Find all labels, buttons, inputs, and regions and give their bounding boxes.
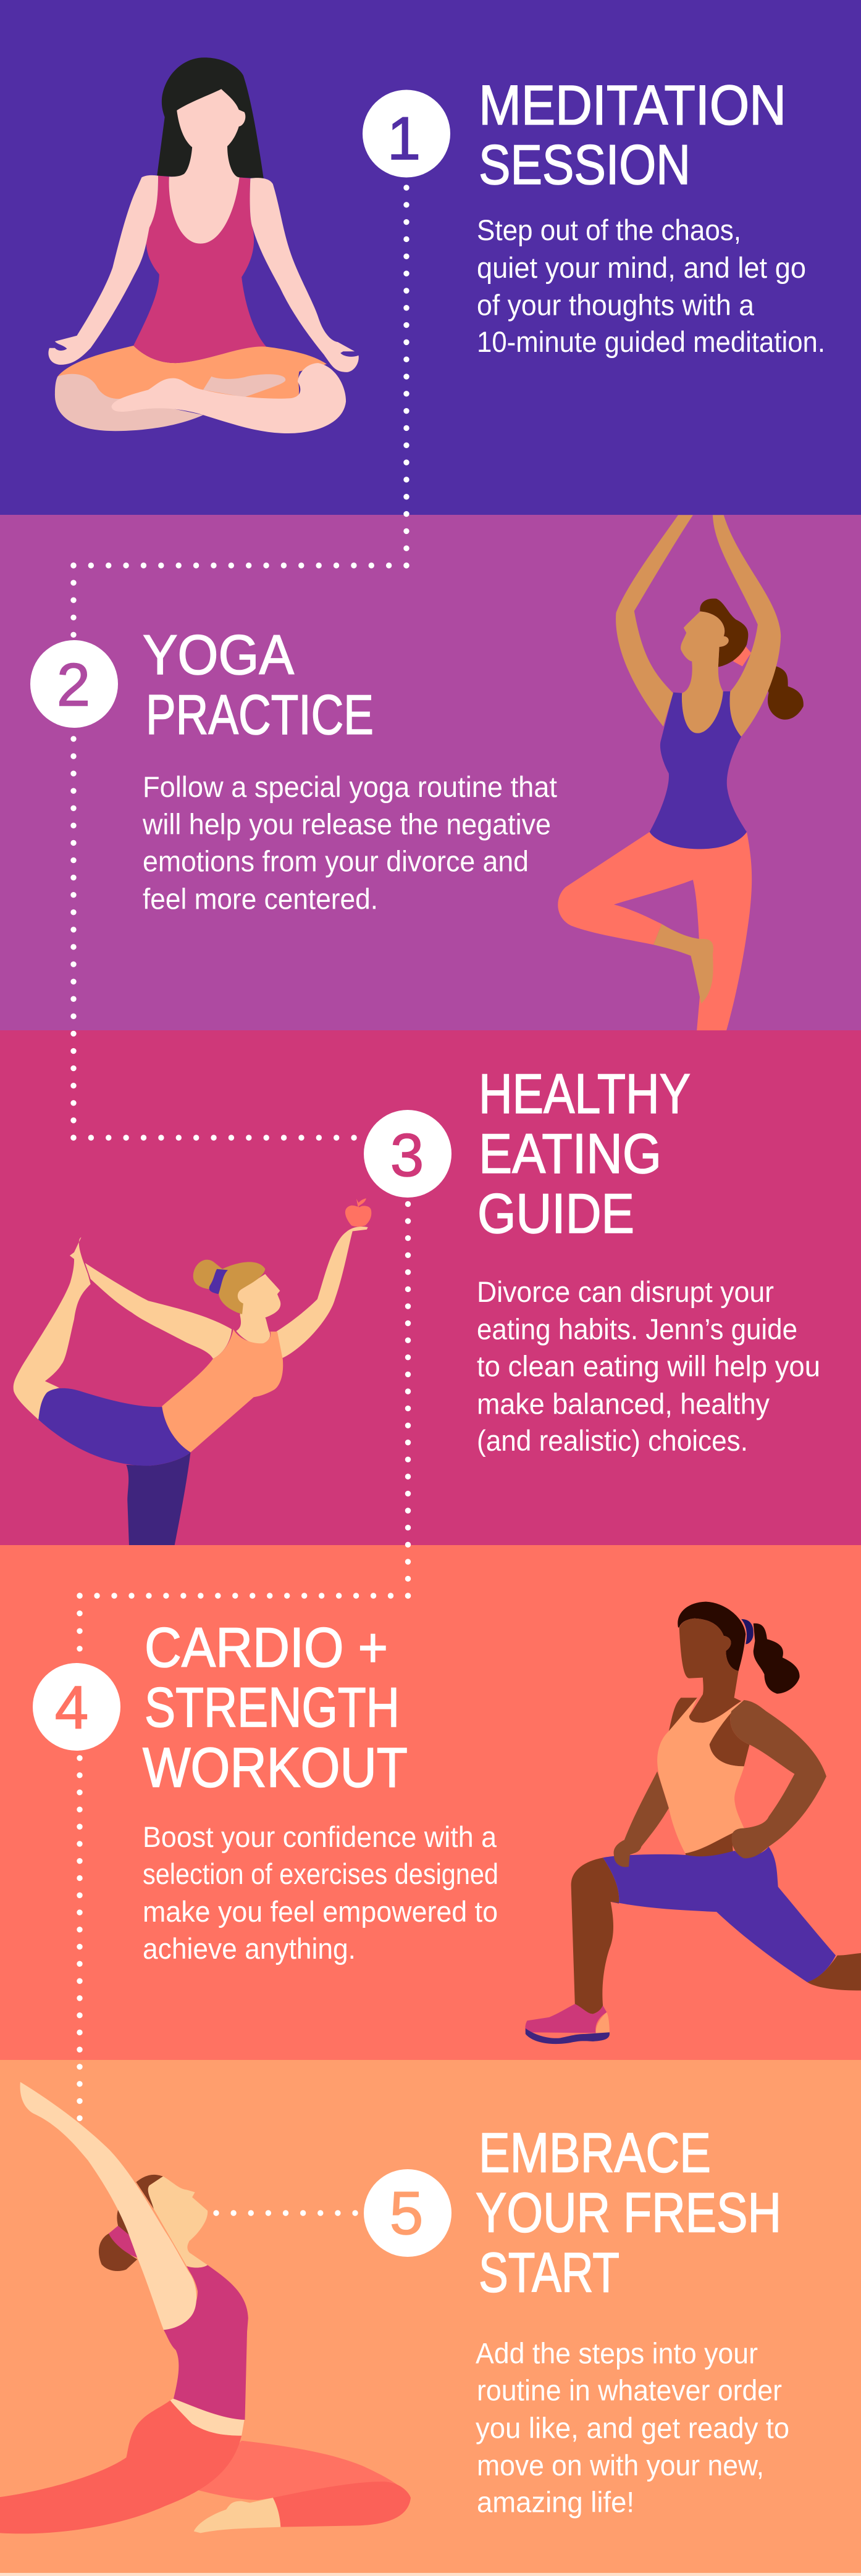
text: healthy eating description bbox=[477, 1275, 820, 1457]
panel: yoga background bbox=[0, 515, 861, 1030]
heading: yoga practice bbox=[143, 624, 374, 746]
text: yoga description: feel more centered. bbox=[143, 883, 378, 915]
badge: number 3 bbox=[364, 1110, 452, 1198]
text: cardio description: make you feel empowered to bbox=[143, 1895, 498, 1928]
illustration: woman doing a lunge bbox=[525, 1602, 861, 2044]
heading: cardio + strength workout: CARDIO + bbox=[145, 1617, 388, 1679]
text: healthy eating description: to clean eating will help you bbox=[477, 1349, 820, 1383]
badge: number 3: 3 bbox=[390, 1121, 424, 1189]
text: meditation description: quiet your mind, and let go bbox=[477, 251, 806, 284]
heading: cardio + strength workout: WORKOUT bbox=[143, 1737, 408, 1799]
text: healthy eating description: eating habits. Jenn’s guide bbox=[477, 1312, 797, 1346]
text: healthy eating description: make balanced, healthy bbox=[477, 1388, 770, 1420]
text: fresh start description bbox=[476, 2337, 789, 2519]
heading: healthy eating guide: HEALTHY bbox=[479, 1063, 691, 1125]
panel: fresh start background bbox=[0, 2060, 861, 2573]
text: healthy eating description: (and realistic) choices. bbox=[477, 1424, 748, 1457]
panel: cardio background bbox=[0, 1545, 861, 2060]
heading: embrace your fresh start: YOUR FRESH bbox=[476, 2182, 781, 2245]
text: meditation description bbox=[477, 214, 825, 358]
badge: number 2 bbox=[30, 640, 118, 728]
illustration: woman in seated stretch, arm raised bbox=[0, 2082, 411, 2533]
heading: embrace your fresh start: START bbox=[479, 2242, 620, 2304]
text: fresh start description: Add the steps into your bbox=[476, 2337, 758, 2369]
text: yoga description: Follow a special yoga routine that bbox=[143, 770, 557, 803]
heading: healthy eating guide bbox=[477, 1063, 691, 1245]
heading: cardio + strength workout bbox=[143, 1617, 408, 1799]
text: cardio description: achieve anything. bbox=[143, 1932, 356, 1965]
text: meditation description: of your thoughts with a bbox=[477, 289, 755, 321]
text: cardio description: selection of exercises designed bbox=[143, 1857, 498, 1890]
heading: healthy eating guide: EATING bbox=[479, 1123, 662, 1185]
badge: number 1: 1 bbox=[387, 104, 421, 172]
text: cardio description bbox=[143, 1820, 498, 1965]
heading: yoga practice: PRACTICE bbox=[146, 684, 374, 746]
text: yoga description: emotions from your divorce and bbox=[143, 844, 529, 878]
text: meditation description: Step out of the chaos, bbox=[477, 214, 741, 246]
text: yoga description: will help you release the negative bbox=[142, 807, 551, 841]
badge: number 5: 5 bbox=[390, 2179, 423, 2247]
heading: cardio + strength workout: STRENGTH bbox=[145, 1677, 400, 1739]
badge: number 5 bbox=[364, 2169, 452, 2257]
illustration: woman in dancer pose holding apple bbox=[14, 1198, 371, 1545]
illustration: woman in tree pose bbox=[558, 515, 804, 1030]
text: cardio description: Boost your confidence with a bbox=[143, 1820, 497, 1853]
heading: meditation session: MEDITATION bbox=[479, 74, 786, 137]
text: fresh start description: you like, and get ready to bbox=[476, 2411, 789, 2445]
panel: healthy eating background bbox=[0, 1030, 861, 1545]
text: meditation description: 10-minute guided meditation. bbox=[477, 325, 825, 358]
heading: healthy eating guide: GUIDE bbox=[477, 1183, 634, 1245]
badge: number 4 bbox=[33, 1663, 120, 1751]
badge: number 1 bbox=[363, 90, 450, 178]
text: healthy eating description: Divorce can disrupt your bbox=[477, 1275, 774, 1308]
text: fresh start description: move on with your new, bbox=[477, 2449, 764, 2482]
badge: number 4: 4 bbox=[55, 1674, 88, 1741]
heading: meditation session: SESSION bbox=[479, 134, 691, 196]
heading: embrace your fresh start: EMBRACE bbox=[479, 2122, 711, 2184]
heading: yoga practice: YOGA bbox=[143, 624, 294, 686]
heading: embrace your fresh start bbox=[476, 2122, 781, 2304]
dotted connector path bbox=[73, 188, 408, 2213]
illustration: woman meditating cross-legged bbox=[48, 57, 359, 433]
badge: number 2: 2 bbox=[57, 651, 90, 719]
text: yoga description bbox=[142, 770, 557, 915]
panel: meditation background bbox=[0, 0, 861, 515]
heading: meditation session bbox=[479, 74, 786, 196]
text: fresh start description: routine in whatever order bbox=[477, 2374, 782, 2406]
text: fresh start description: amazing life! bbox=[477, 2485, 634, 2519]
